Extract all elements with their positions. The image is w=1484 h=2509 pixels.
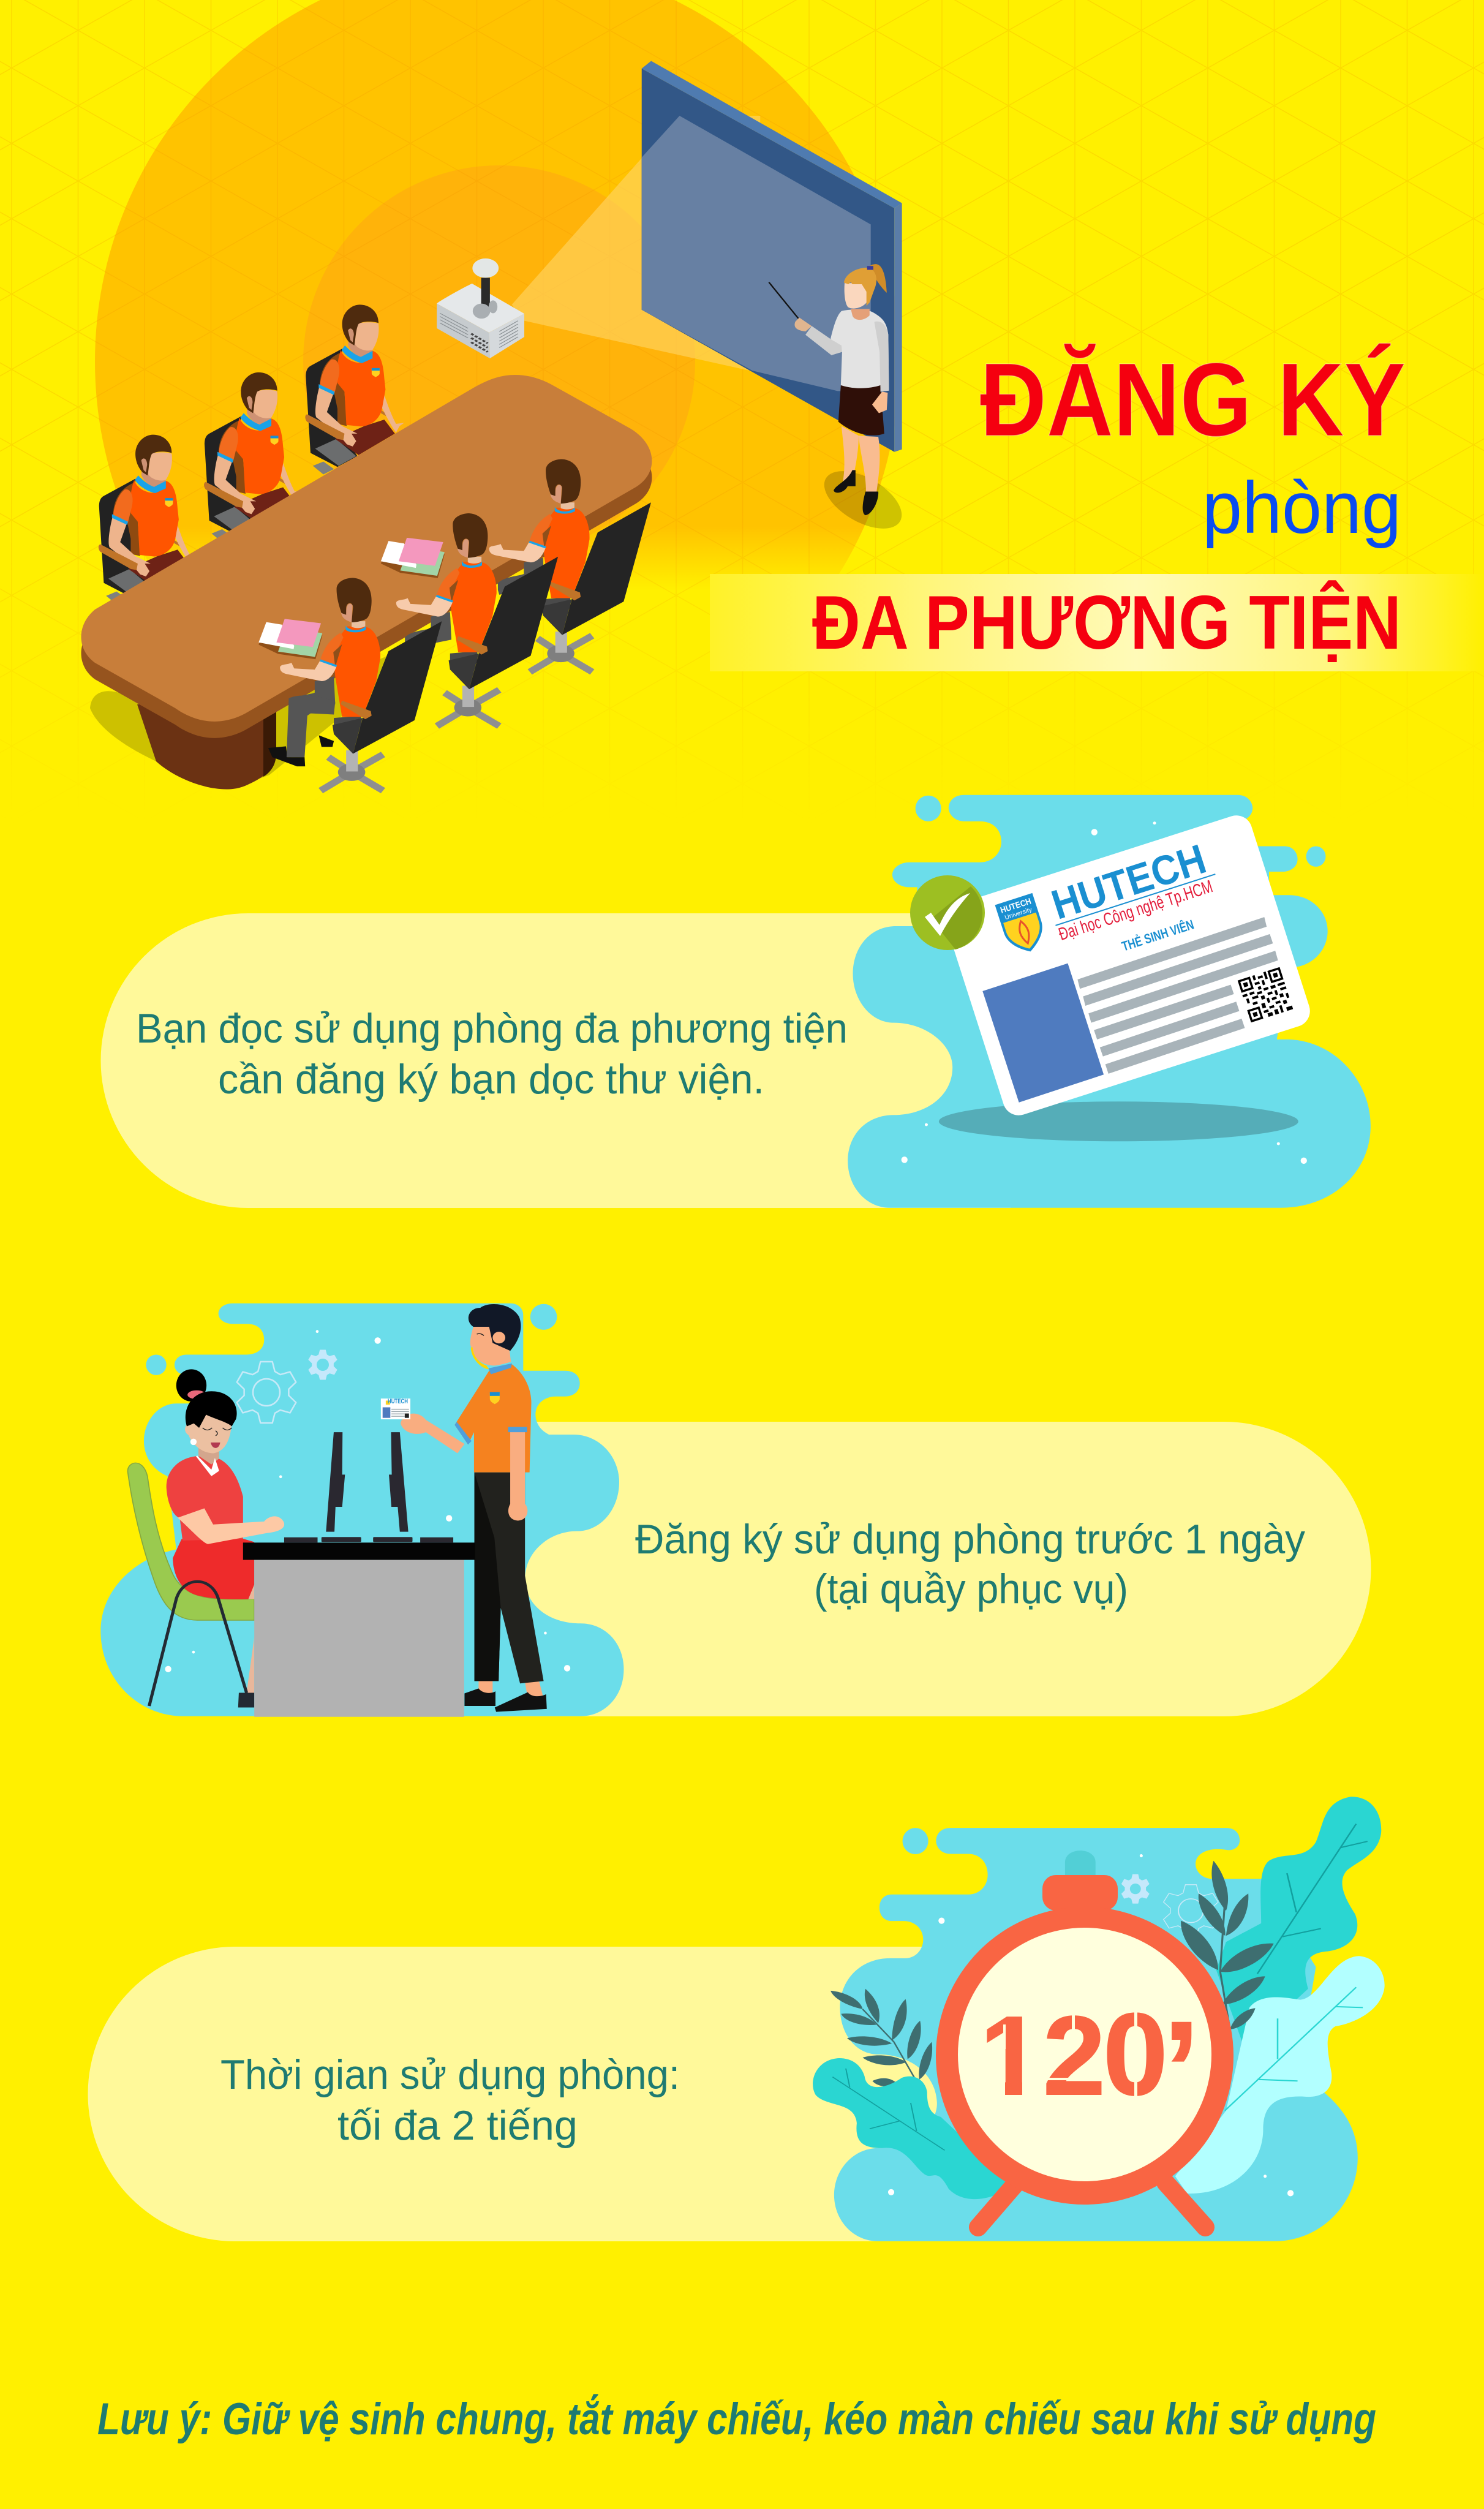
clock legs (978, 2183, 1205, 2227)
student near (280, 578, 442, 791)
panel text: Thời gian sử dụng phòng: (220, 2051, 680, 2098)
panel: usage time (88, 1797, 1385, 2241)
title line 2: phòng (1202, 467, 1401, 549)
card shield logo (995, 893, 1049, 957)
panel background (490, 1422, 1371, 1716)
title highlight band (710, 574, 1484, 671)
right teal leaf (1216, 1797, 1381, 2051)
projector (437, 258, 524, 358)
clock cap (1042, 1875, 1118, 1911)
table shadow (90, 649, 423, 787)
teacher floor shadow (815, 459, 911, 540)
hand-held card (381, 1398, 410, 1419)
students, books and chairs, right row (258, 459, 651, 791)
card texts: THẺ SINH VIÊN (1120, 917, 1196, 954)
teacher (769, 264, 889, 515)
card photo and detail bars (982, 917, 1278, 1103)
blue blob (834, 1828, 1358, 2241)
panel text: Đăng ký sử dụng phòng trước 1 ngày (635, 1516, 1305, 1563)
title (710, 342, 1484, 671)
left dark branch (831, 1989, 932, 2086)
scene in zoom coordinates (100, 1304, 623, 1716)
table base (137, 689, 276, 789)
outline gear (237, 1362, 296, 1423)
blue blob (100, 1304, 623, 1716)
clock number: 1 (980, 1993, 1042, 2118)
conference table (81, 375, 652, 738)
background grid pattern (0, 0, 1484, 701)
panel background (88, 1947, 955, 2241)
tiny card label: HUTECH (388, 1398, 408, 1405)
projector light beam (512, 116, 760, 370)
computers (284, 1432, 453, 1542)
QR code (1238, 967, 1293, 1022)
card body (941, 812, 1314, 1119)
standing man (401, 1304, 547, 1712)
solid gear (308, 1350, 337, 1379)
clock number: 2 (1043, 1993, 1105, 2118)
title line 1: ĐĂNG KÝ (980, 342, 1406, 458)
panel text (136, 1005, 848, 1103)
green chair (128, 1463, 254, 1620)
books (258, 538, 445, 659)
chair leg (149, 1582, 247, 1706)
left teal leaf (813, 2058, 1008, 2199)
large orange circle (95, 0, 900, 764)
student middle (396, 513, 558, 726)
solid gear (1121, 1874, 1150, 1904)
panel text (220, 2051, 680, 2149)
card shield logo: University (1004, 907, 1033, 921)
card texts: Đại học Công nghệ Tp.HCM (1057, 877, 1215, 945)
card texts: HUTECH (1046, 836, 1211, 929)
near student trousers (287, 695, 335, 757)
right dark branch (1181, 1861, 1274, 2029)
panel background (100, 913, 1011, 1208)
clock number: ’ (1162, 1991, 1201, 2149)
clock face (958, 1928, 1211, 2181)
outline gear behind leaves (1164, 1885, 1218, 1937)
student card (941, 812, 1314, 1119)
clock number: 0 (1103, 1990, 1168, 2119)
clock top button (1065, 1851, 1096, 1876)
panel text: tối đa 2 tiếng (337, 2102, 578, 2149)
card texts (993, 834, 1230, 987)
panel text: Bạn đọc sử dụng phòng đa phương tiện (136, 1005, 848, 1052)
desk (243, 1542, 475, 1717)
title line 3: ĐA PHƯƠNG TIỆN (812, 580, 1401, 665)
stencil gaps (980, 2010, 1137, 2100)
panel text: cần đăng ký bạn dọc thư viện. (218, 1056, 764, 1103)
leg and shoes near student (268, 735, 334, 766)
panel text: (tại quầy phục vụ) (814, 1566, 1128, 1612)
seated students, left row (99, 304, 404, 605)
alarm clock (936, 1875, 1234, 2227)
receptionist woman (167, 1369, 284, 1707)
inner orange circle (303, 165, 695, 557)
check badge (910, 875, 985, 950)
panel text (635, 1516, 1305, 1612)
student far (489, 459, 651, 672)
projection screen (642, 61, 902, 452)
right light leaf (1175, 1956, 1385, 2194)
blue blob (848, 795, 1371, 1208)
card shield logo: HUTECH (999, 896, 1033, 915)
panel: register one day ahead (100, 1304, 1371, 1717)
near student armrest (341, 701, 372, 719)
clock ring (936, 1907, 1234, 2205)
hero illustration: classroom (81, 61, 911, 791)
panel: library card registration (100, 795, 1371, 1208)
